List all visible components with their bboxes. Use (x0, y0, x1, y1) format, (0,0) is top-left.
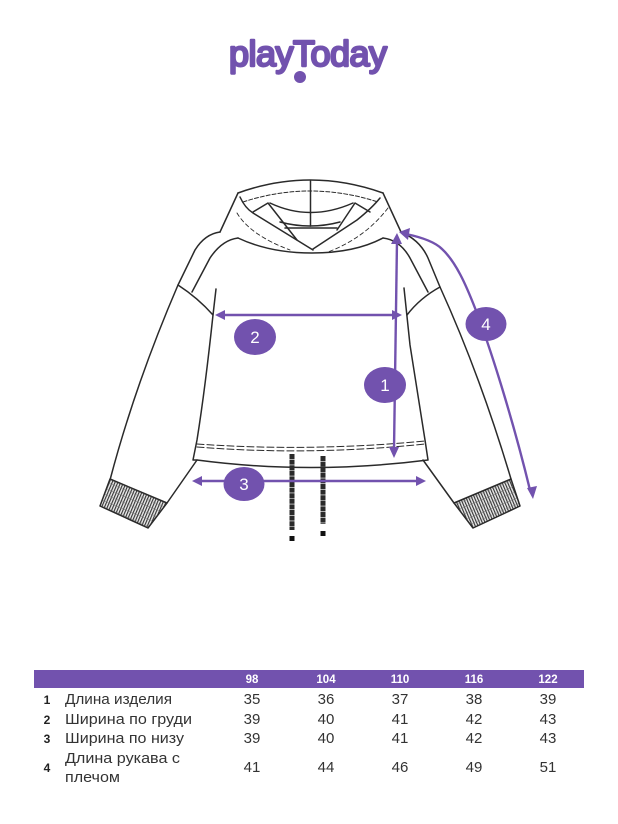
badge 3: 3 (239, 475, 249, 494)
row 2: 41 (392, 711, 408, 728)
row 1: 38 (466, 691, 482, 708)
arrow 1: garment length (389, 233, 402, 458)
left cuff (100, 479, 167, 528)
badge 4: 4 (481, 315, 491, 334)
arrow 3: bottom width (192, 476, 426, 486)
row 3: 43 (540, 730, 556, 747)
row 2: 42 (466, 711, 482, 728)
right sleeve and shoulder (383, 232, 511, 503)
row 2 (44, 711, 556, 728)
badge 1: 1 (380, 376, 390, 395)
row 4: 46 (392, 759, 408, 776)
row 3: Ширина по низу (65, 730, 185, 747)
row 1: 36 (318, 691, 334, 708)
row 4: 41 (244, 759, 260, 776)
drawstrings (292, 454, 323, 541)
row 3: 39 (244, 730, 260, 747)
body (193, 288, 428, 468)
row 3: 3 (44, 732, 51, 746)
badge 1 (364, 367, 406, 403)
hood (220, 180, 401, 253)
table header (34, 670, 584, 688)
right cuff (454, 479, 520, 528)
row 4: плечом (65, 769, 120, 786)
row 4: 44 (318, 759, 334, 776)
row 2: 40 (318, 711, 334, 728)
badge 2 (234, 319, 276, 355)
logo: playToday: playToday (229, 33, 387, 74)
arrow 4: sleeve length (399, 228, 537, 499)
badge 3 (224, 467, 264, 501)
row 1 (44, 691, 556, 708)
row 4 (44, 750, 556, 786)
table header: 110 (391, 674, 409, 686)
row 2: 2 (44, 713, 51, 727)
row 3: 40 (318, 730, 334, 747)
table header: 116 (465, 674, 483, 686)
row 4: 51 (540, 759, 556, 776)
row 1: 35 (244, 691, 260, 708)
row 4: 4 (44, 761, 51, 775)
badge 2: 2 (250, 328, 260, 347)
table header: 98 (246, 674, 259, 686)
hoodie line drawing (100, 180, 520, 541)
size table (34, 670, 584, 786)
row 3: 41 (392, 730, 408, 747)
row 2: Ширина по груди (65, 711, 192, 728)
row 2: 39 (244, 711, 260, 728)
row 1: 39 (540, 691, 556, 708)
row 4: Длина рукава с (65, 750, 181, 767)
table header: 122 (538, 674, 558, 686)
row 1: 1 (44, 693, 51, 707)
row 1: Длина изделия (65, 691, 172, 708)
row 3 (44, 730, 556, 747)
row 2: 43 (540, 711, 556, 728)
left sleeve and shoulder (110, 232, 238, 503)
arrow 2: chest width (215, 310, 402, 320)
row 4: 49 (466, 759, 482, 776)
badge 4 (466, 307, 506, 341)
row 3: 42 (466, 730, 482, 747)
table header: 104 (316, 674, 336, 686)
row 1: 37 (392, 691, 408, 708)
